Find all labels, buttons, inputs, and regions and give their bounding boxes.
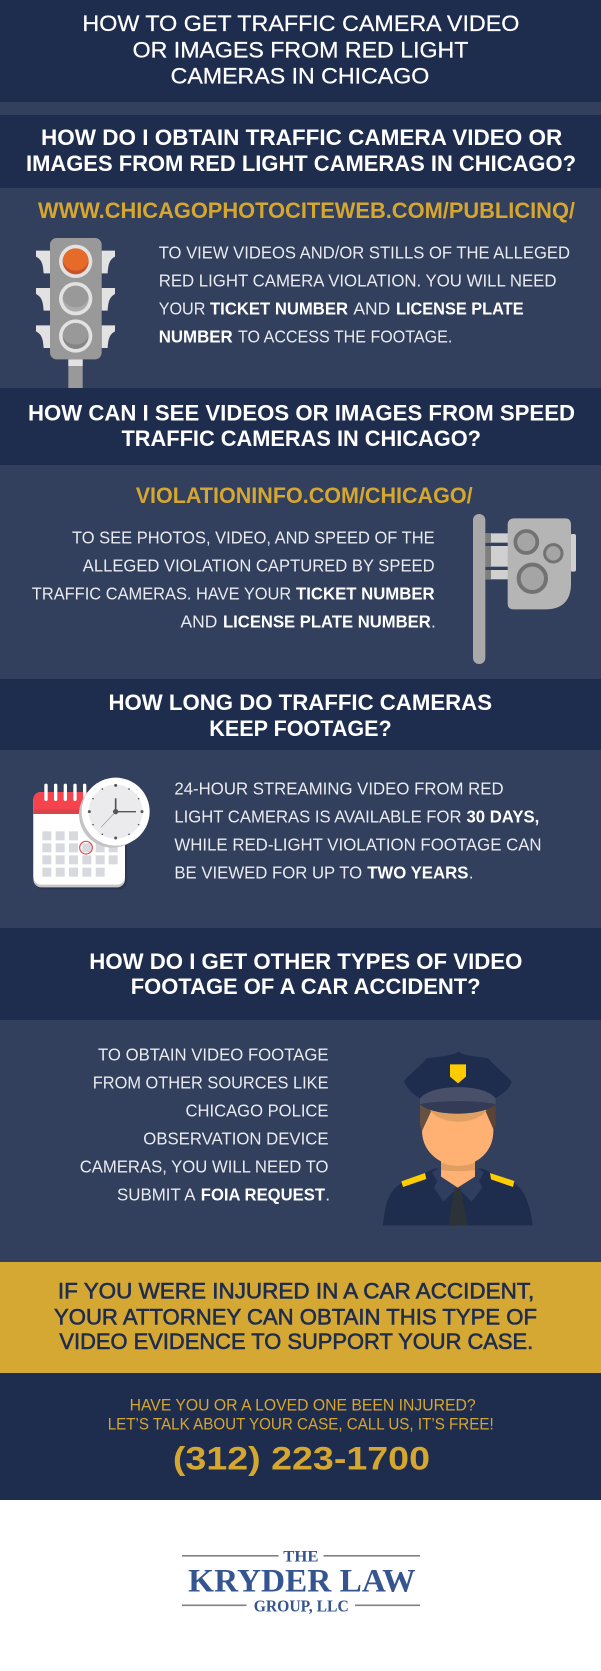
- text: retention details: BE VIEWED FOR UP TO: [174, 862, 362, 882]
- text: retention details: [174, 778, 542, 882]
- text: FOIA instructions: FROM OTHER SOURCES LIKE: [93, 1072, 328, 1092]
- text: red light instructions: LICENSE PLATE: [396, 298, 524, 318]
- title banner: [0, 0, 601, 102]
- text: red light instructions: TO ACCESS THE FOOTAGE.: [238, 326, 452, 346]
- text: red light instructions: NUMBER: [159, 326, 233, 346]
- callout: attorney evidence: IF YOU WERE INJURED IN A CAR ACCIDENT,: [58, 1278, 534, 1303]
- heading: red light cameras: HOW DO I OBTAIN TRAFFIC CAMERA VIDEO OR: [41, 125, 562, 150]
- text: speed camera instructions: LICENSE PLATE NUMBER: [223, 611, 431, 631]
- phone number: (312) 223-1700: [173, 1440, 430, 1476]
- text: FOIA instructions: SUBMIT A: [117, 1184, 196, 1204]
- call to action: HAVE YOU OR A LOVED ONE BEEN INJURED?: [130, 1397, 476, 1415]
- heading: footage retention: KEEP FOOTAGE?: [209, 716, 392, 741]
- text: speed camera instructions: [32, 527, 436, 631]
- heading: speed cameras: TRAFFIC CAMERAS IN CHICAGO?: [122, 426, 481, 451]
- text: speed camera instructions: TO SEE PHOTOS, VIDEO, AND SPEED OF THE: [72, 527, 435, 547]
- call to action: [0, 1373, 601, 1500]
- link: photo cite web: WWW.CHICAGOPHOTOCITEWEB.COM/PUBLICINQ/: [38, 198, 576, 223]
- logo: The Kryder Law Group: KRYDER LAW: [188, 1563, 416, 1599]
- panel: other video sources: [0, 928, 601, 1262]
- heading: other video sources: [0, 928, 601, 1020]
- title banner: HOW TO GET TRAFFIC CAMERA VIDEO: [82, 11, 519, 36]
- text: retention details: LIGHT CAMERAS IS AVAILABLE FOR: [174, 806, 462, 826]
- icon: traffic light: [36, 238, 115, 388]
- text: FOIA instructions: .: [325, 1184, 330, 1204]
- heading: speed cameras: HOW CAN I SEE VIDEOS OR IMAGES FROM SPEED: [28, 401, 575, 426]
- heading: other video sources: FOOTAGE OF A CAR ACCIDENT?: [131, 974, 481, 999]
- text: retention details: 30 DAYS,: [466, 806, 539, 826]
- heading: footage retention: [0, 679, 601, 750]
- text: speed camera instructions: TICKET NUMBER: [296, 583, 435, 603]
- title banner: OR IMAGES FROM RED LIGHT: [133, 38, 469, 63]
- heading: red light cameras: IMAGES FROM RED LIGHT CAMERAS IN CHICAGO?: [26, 151, 576, 176]
- title banner: CAMERAS IN CHICAGO: [171, 64, 429, 89]
- logo: The Kryder Law Group: THE: [283, 1549, 318, 1566]
- logo: The Kryder Law Group: [182, 1549, 420, 1615]
- text: retention details: 24-HOUR STREAMING VIDEO FROM RED: [174, 778, 504, 798]
- link: violation info: VIOLATIONINFO.COM/CHICAGO/: [136, 483, 473, 508]
- text: FOIA instructions: CAMERAS, YOU WILL NEED TO: [80, 1156, 328, 1176]
- text: red light instructions: TICKET NUMBER: [210, 298, 348, 318]
- heading: red light cameras: [0, 115, 601, 188]
- callout: attorney evidence: [0, 1262, 601, 1373]
- heading: footage retention: HOW LONG DO TRAFFIC CAMERAS: [108, 690, 492, 715]
- text: FOIA instructions: FOIA REQUEST: [201, 1184, 325, 1204]
- text: red light instructions: TO VIEW VIDEOS AND/OR STILLS OF THE ALLEGED: [159, 242, 570, 262]
- text: FOIA instructions: CHICAGO POLICE: [186, 1100, 328, 1120]
- text: red light instructions: YOUR: [159, 298, 205, 318]
- text: FOIA instructions: OBSERVATION DEVICE: [143, 1128, 328, 1148]
- callout: attorney evidence: VIDEO EVIDENCE TO SUPPORT YOUR CASE.: [59, 1329, 533, 1354]
- text: speed camera instructions: TRAFFIC CAMERAS. HAVE YOUR: [32, 583, 291, 603]
- text: red light instructions: AND: [353, 298, 390, 318]
- heading: speed cameras: [0, 388, 601, 465]
- text: retention details: .: [469, 862, 474, 882]
- text: speed camera instructions: AND: [180, 611, 217, 631]
- text: speed camera instructions: ALLEGED VIOLATION CAPTURED BY SPEED: [83, 555, 435, 575]
- text: FOIA instructions: [80, 1044, 330, 1204]
- panel: red light cameras: [0, 115, 601, 388]
- panel: speed cameras: [0, 388, 601, 679]
- text: red light instructions: RED LIGHT CAMERA VIOLATION. YOU WILL NEED: [159, 270, 556, 290]
- panel: footage retention: [0, 679, 601, 928]
- text: FOIA instructions: TO OBTAIN VIDEO FOOTAGE: [98, 1044, 328, 1064]
- callout: attorney evidence: YOUR ATTORNEY CAN OBTAIN THIS TYPE OF: [54, 1304, 537, 1329]
- text: retention details: TWO YEARS: [367, 862, 468, 882]
- logo: The Kryder Law Group: GROUP, LLC: [254, 1596, 349, 1615]
- text: red light instructions: [159, 242, 570, 346]
- heading: other video sources: HOW DO I GET OTHER TYPES OF VIDEO: [89, 949, 522, 974]
- call to action: LET’S TALK ABOUT YOUR CASE, CALL US, IT’S FREE!: [108, 1415, 494, 1433]
- icon: police officer: [383, 1052, 533, 1225]
- icon: calendar and clock: [33, 778, 150, 890]
- text: retention details: WHILE RED-LIGHT VIOLATION FOOTAGE CAN: [174, 834, 542, 854]
- text: speed camera instructions: .: [431, 611, 436, 631]
- icon: speed camera: [473, 514, 576, 664]
